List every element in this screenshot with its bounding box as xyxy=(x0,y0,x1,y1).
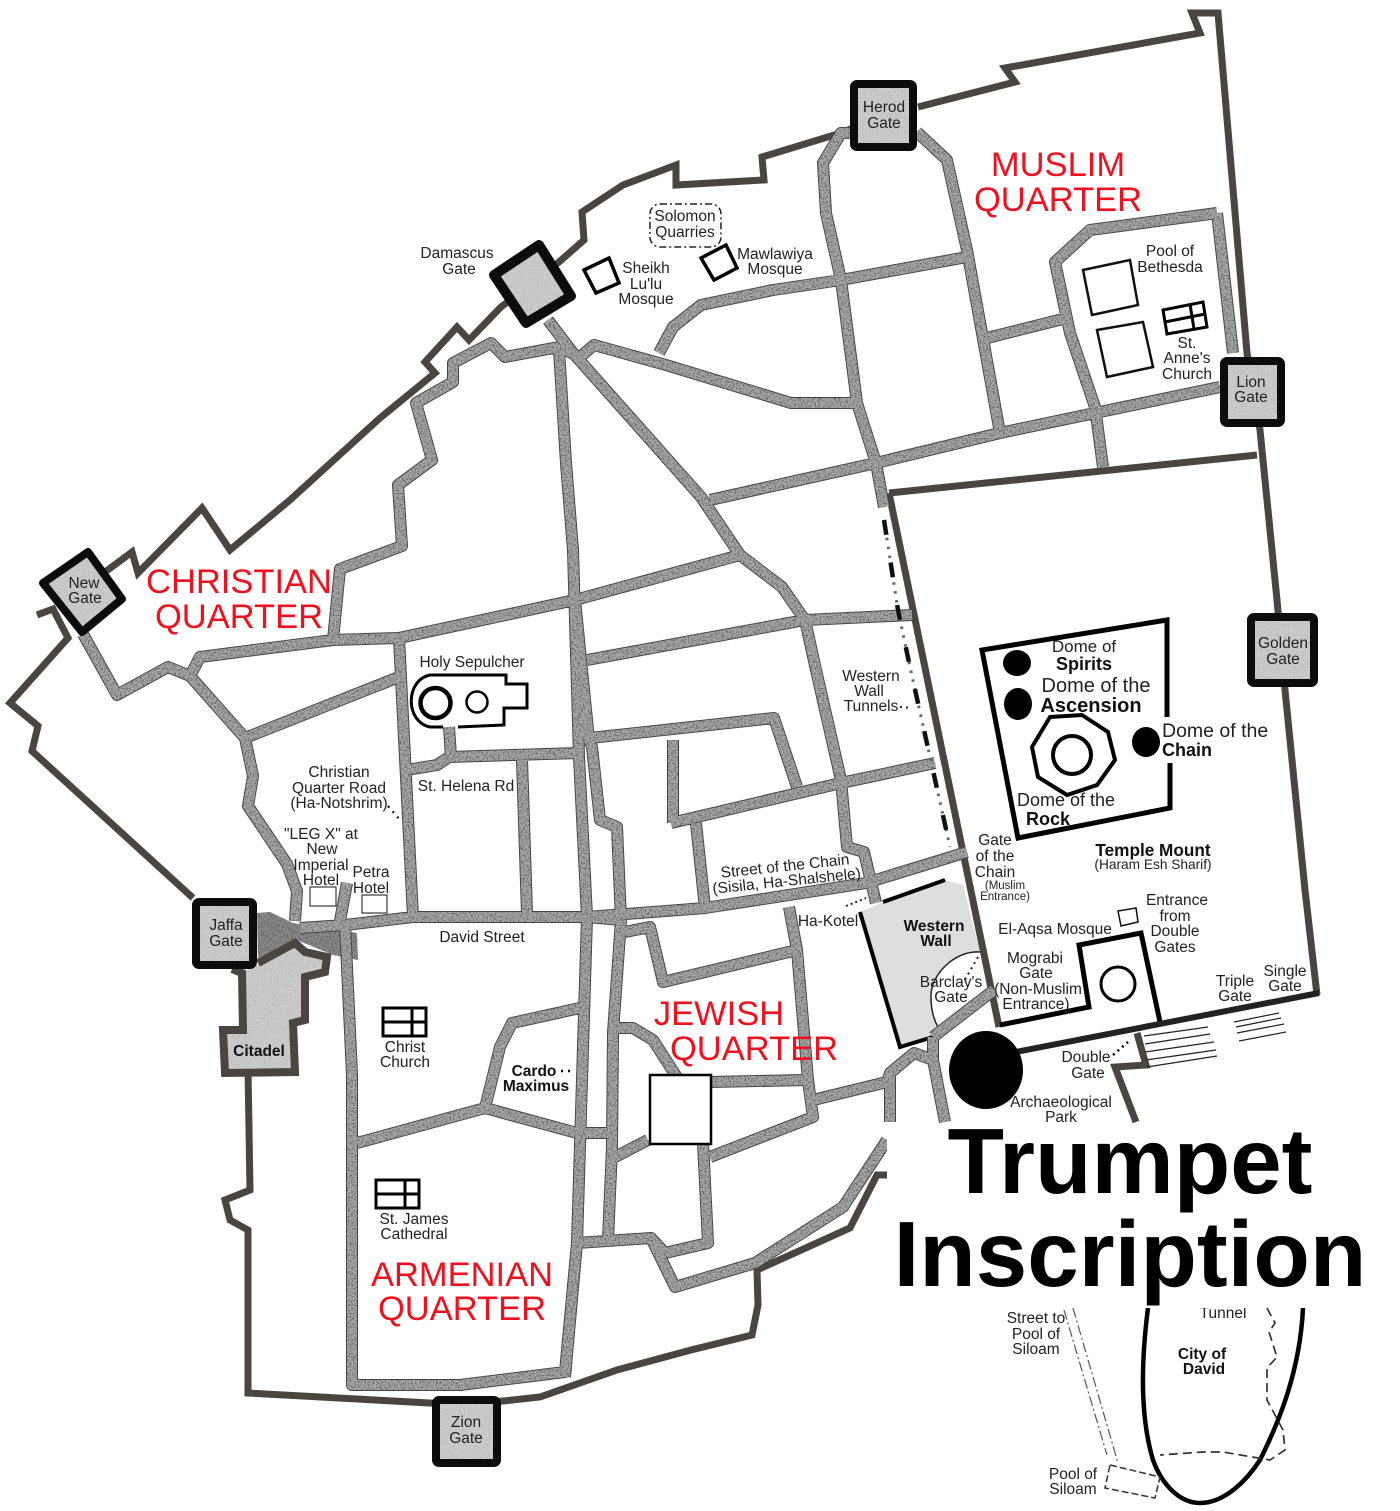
St. Anne's Church xyxy=(1162,302,1212,383)
St. Anne's Church: Church xyxy=(1162,366,1212,383)
Western Wall Tunnels: Western xyxy=(842,668,900,685)
Street to Pool of Siloam: Pool of xyxy=(1012,1326,1061,1343)
pointer dots xyxy=(388,806,400,820)
Western Wall plaza xyxy=(860,880,980,1047)
gate: Lion xyxy=(1224,361,1281,423)
Single Gate label: Single xyxy=(1263,963,1307,980)
Christ Church xyxy=(380,1008,430,1071)
quarter labels: QUARTER xyxy=(974,181,1142,219)
Solomon Quarries: Solomon xyxy=(654,208,716,225)
Mograbi Gate label: Entrance) xyxy=(1002,996,1070,1013)
Mawlawiya Mosque: Mosque xyxy=(747,261,803,278)
Gate of the Chain label: (Muslim xyxy=(985,880,1025,892)
Leg X label: Hotel xyxy=(303,872,339,889)
street network xyxy=(83,132,1233,1385)
gate: Zion: Gate xyxy=(449,1430,483,1447)
Mograbi Gate label: (Non-Muslim xyxy=(994,981,1082,998)
Sheikh Lu'lu Mosque: Lu'lu xyxy=(630,276,662,293)
Jewish Quarter square xyxy=(650,1075,711,1144)
St. James Cathedral: St. James xyxy=(380,1211,449,1228)
Single Gate label: Gate xyxy=(1268,978,1302,995)
Ha-Kotel label: Ha-Kotel xyxy=(798,913,858,930)
City of David xyxy=(1143,1305,1303,1503)
Temple Mount label: (Haram Esh Sharif) xyxy=(1094,857,1212,872)
quarter labels: QUARTER xyxy=(670,1030,838,1068)
Dome of the Rock label: Dome of the xyxy=(1017,790,1115,810)
Dome of the Ascension label: Ascension xyxy=(1040,695,1142,717)
Mograbi Gate label: Gate xyxy=(1019,965,1053,982)
Barclay's Gate label: Gate xyxy=(934,989,968,1006)
Sheikh Lu'lu Mosque: Sheikh xyxy=(622,260,670,277)
Street to Pool of Siloam: Siloam xyxy=(1012,1341,1060,1358)
Dome of the Chain label: Chain xyxy=(1162,740,1212,760)
Street of the Chain label: (Sisila, Ha-Shalshele) xyxy=(712,865,862,898)
Damascus Gate label: Gate xyxy=(442,261,476,278)
Pool of Siloam: Siloam xyxy=(1049,1481,1097,1498)
tunnel line xyxy=(884,520,950,847)
Gate of the Chain label: Chain xyxy=(975,864,1015,881)
St. Anne's Church: St. xyxy=(1178,335,1196,352)
quarter labels: QUARTER xyxy=(155,598,323,636)
Christ Church: Christ xyxy=(385,1039,426,1056)
St. James Cathedral xyxy=(376,1180,449,1243)
gate: Jaffa: Gate xyxy=(209,933,243,950)
Archaeological Park label: Park xyxy=(1045,1109,1077,1126)
Western Wall label: Wall xyxy=(920,933,952,950)
Jaffa Gate plaza xyxy=(257,912,358,960)
gate: Jaffa xyxy=(196,902,253,965)
Citadel xyxy=(223,943,327,1073)
Cardo Maximus: Maximus xyxy=(503,1078,569,1095)
gate: Zion: Zion xyxy=(451,1414,481,1431)
Leg X label: "LEG X" at xyxy=(284,826,359,843)
Western Wall Tunnels xyxy=(842,668,912,715)
Entrance from Double Gates label: Double xyxy=(1150,923,1200,940)
Double Gate label: Double xyxy=(1061,1049,1111,1066)
gate: New: New xyxy=(68,575,100,592)
Double Gate label xyxy=(1061,1042,1128,1082)
Gate of the Chain label: Entrance) xyxy=(980,891,1030,903)
title: Trumpet Inscription: Inscription xyxy=(894,1202,1366,1306)
St. Helena Rd label: St. Helena Rd xyxy=(418,778,514,795)
gate: Jaffa: Jaffa xyxy=(209,917,243,934)
Holy Sepulcher xyxy=(411,654,527,727)
Solomon Quarries: Quarries xyxy=(655,224,715,241)
Double Gate label: Gate xyxy=(1071,1065,1105,1082)
Gate of the Chain label: of the xyxy=(976,848,1014,865)
Gate of the Chain label: Gate xyxy=(978,832,1012,849)
gate: Golden xyxy=(1251,617,1314,683)
St. James Cathedral: Cathedral xyxy=(380,1226,448,1243)
Petra Hotel label: Petra xyxy=(352,864,390,881)
Barclay's Gate label: Barclay's xyxy=(920,974,982,991)
Christ Church: Church xyxy=(380,1054,430,1071)
Dome of the Ascension label: Dome of the xyxy=(1042,675,1150,697)
City of David: City of xyxy=(1178,1346,1227,1363)
street and site labels, west: Quarter Road xyxy=(292,780,386,797)
quarter labels xyxy=(146,146,1142,1328)
gate: Herod xyxy=(854,84,913,147)
Mograbi Gate label: Mograbi xyxy=(1007,950,1063,967)
Triple Gate label: Triple xyxy=(1216,973,1254,990)
Street to Pool of Siloam: Street to xyxy=(1007,1310,1065,1327)
Western Wall Tunnels: Wall xyxy=(854,683,884,700)
Dome of Spirits label: Dome of xyxy=(1052,637,1116,656)
gate: Lion: Gate xyxy=(1234,389,1268,406)
City of David: David xyxy=(1183,1361,1225,1378)
Entrance from Double Gates label: Gates xyxy=(1154,939,1196,956)
Entrance from Double Gates label: from xyxy=(1160,908,1190,925)
gate: New: Gate xyxy=(68,590,102,607)
Street to Pool of Siloam xyxy=(1007,1308,1118,1463)
gate: Lion: Lion xyxy=(1236,374,1266,391)
quarter labels: MUSLIM xyxy=(991,146,1125,184)
street and site labels, west: Christian xyxy=(308,764,370,781)
gate: Zion xyxy=(436,1400,497,1463)
south wall of Temple Mount xyxy=(1000,993,1319,1055)
Cardo Maximus xyxy=(503,1063,572,1095)
gate: Damascus xyxy=(494,245,571,323)
Pool of Siloam xyxy=(1049,1465,1160,1498)
stairs xyxy=(1144,1013,1286,1067)
Dome of the Rock label: Rock xyxy=(1026,809,1071,829)
St. Anne's Church: Anne's xyxy=(1164,350,1211,367)
Temple platform xyxy=(982,620,1170,838)
Mawlawiya Mosque: Mawlawiya xyxy=(737,246,813,263)
quarter labels: QUARTER xyxy=(378,1290,546,1328)
Holy Sepulcher: Holy Sepulcher xyxy=(419,654,525,671)
El-Aqsa Mosque xyxy=(998,908,1160,1025)
black circle marking the inscription xyxy=(949,1031,1023,1109)
Pool of Bethesda: Pool of xyxy=(1146,243,1195,260)
title panel background xyxy=(887,1124,1400,1308)
Petra Hotel label xyxy=(352,864,390,913)
Cardo Maximus: Cardo xyxy=(512,1063,556,1080)
Pool of Bethesda: Bethesda xyxy=(1137,259,1203,276)
gate: Herod: Herod xyxy=(863,99,905,116)
Sheikh Lu'lu Mosque: Mosque xyxy=(618,291,674,308)
title: Trumpet Inscription: Trumpet xyxy=(948,1109,1312,1213)
Pool of Bethesda xyxy=(1083,243,1203,377)
Street of the Chain label: Street of the Chain xyxy=(720,851,850,882)
Ha-Kotel label xyxy=(798,898,866,930)
gate: Herod: Gate xyxy=(867,115,901,132)
gate: Golden: Golden xyxy=(1258,635,1308,652)
gate: Golden: Gate xyxy=(1266,651,1300,668)
Temple Mount label: Temple Mount xyxy=(1095,840,1211,860)
Leg X label xyxy=(284,826,359,906)
gate: New xyxy=(43,552,122,632)
Archaeological Park label: Archaeological xyxy=(1010,1094,1112,1111)
Western Wall Tunnels: Tunnels xyxy=(844,698,899,715)
Mawlawiya Mosque xyxy=(701,245,813,280)
Western Wall label: Western xyxy=(904,918,964,935)
Sheikh Lu'lu Mosque xyxy=(584,258,674,308)
Damascus Gate label: Damascus xyxy=(420,245,494,262)
Entrance from Double Gates label: Entrance xyxy=(1146,892,1208,909)
Triple Gate label: Gate xyxy=(1218,988,1252,1005)
Citadel label: Citadel xyxy=(233,1043,285,1060)
City of David: Tunnel xyxy=(1200,1305,1246,1322)
Leg X label: Imperial xyxy=(293,857,349,874)
quarter labels: ARMENIAN xyxy=(371,1256,553,1294)
El-Aqsa Mosque: El-Aqsa Mosque xyxy=(998,921,1112,938)
Leg X label: New xyxy=(306,841,338,858)
David Street label: David Street xyxy=(439,929,525,946)
Petra Hotel label: Hotel xyxy=(353,880,389,897)
street and site labels, west: (Ha-Notshrim) xyxy=(290,795,388,812)
Pool of Siloam: Pool of xyxy=(1049,1466,1098,1483)
Solomon Quarries xyxy=(650,204,721,247)
quarter labels: JEWISH xyxy=(654,995,784,1033)
Dome of Spirits label: Spirits xyxy=(1056,654,1112,674)
quarter labels: CHRISTIAN xyxy=(146,563,332,601)
Dome of the Chain label: Dome of the xyxy=(1162,720,1268,742)
